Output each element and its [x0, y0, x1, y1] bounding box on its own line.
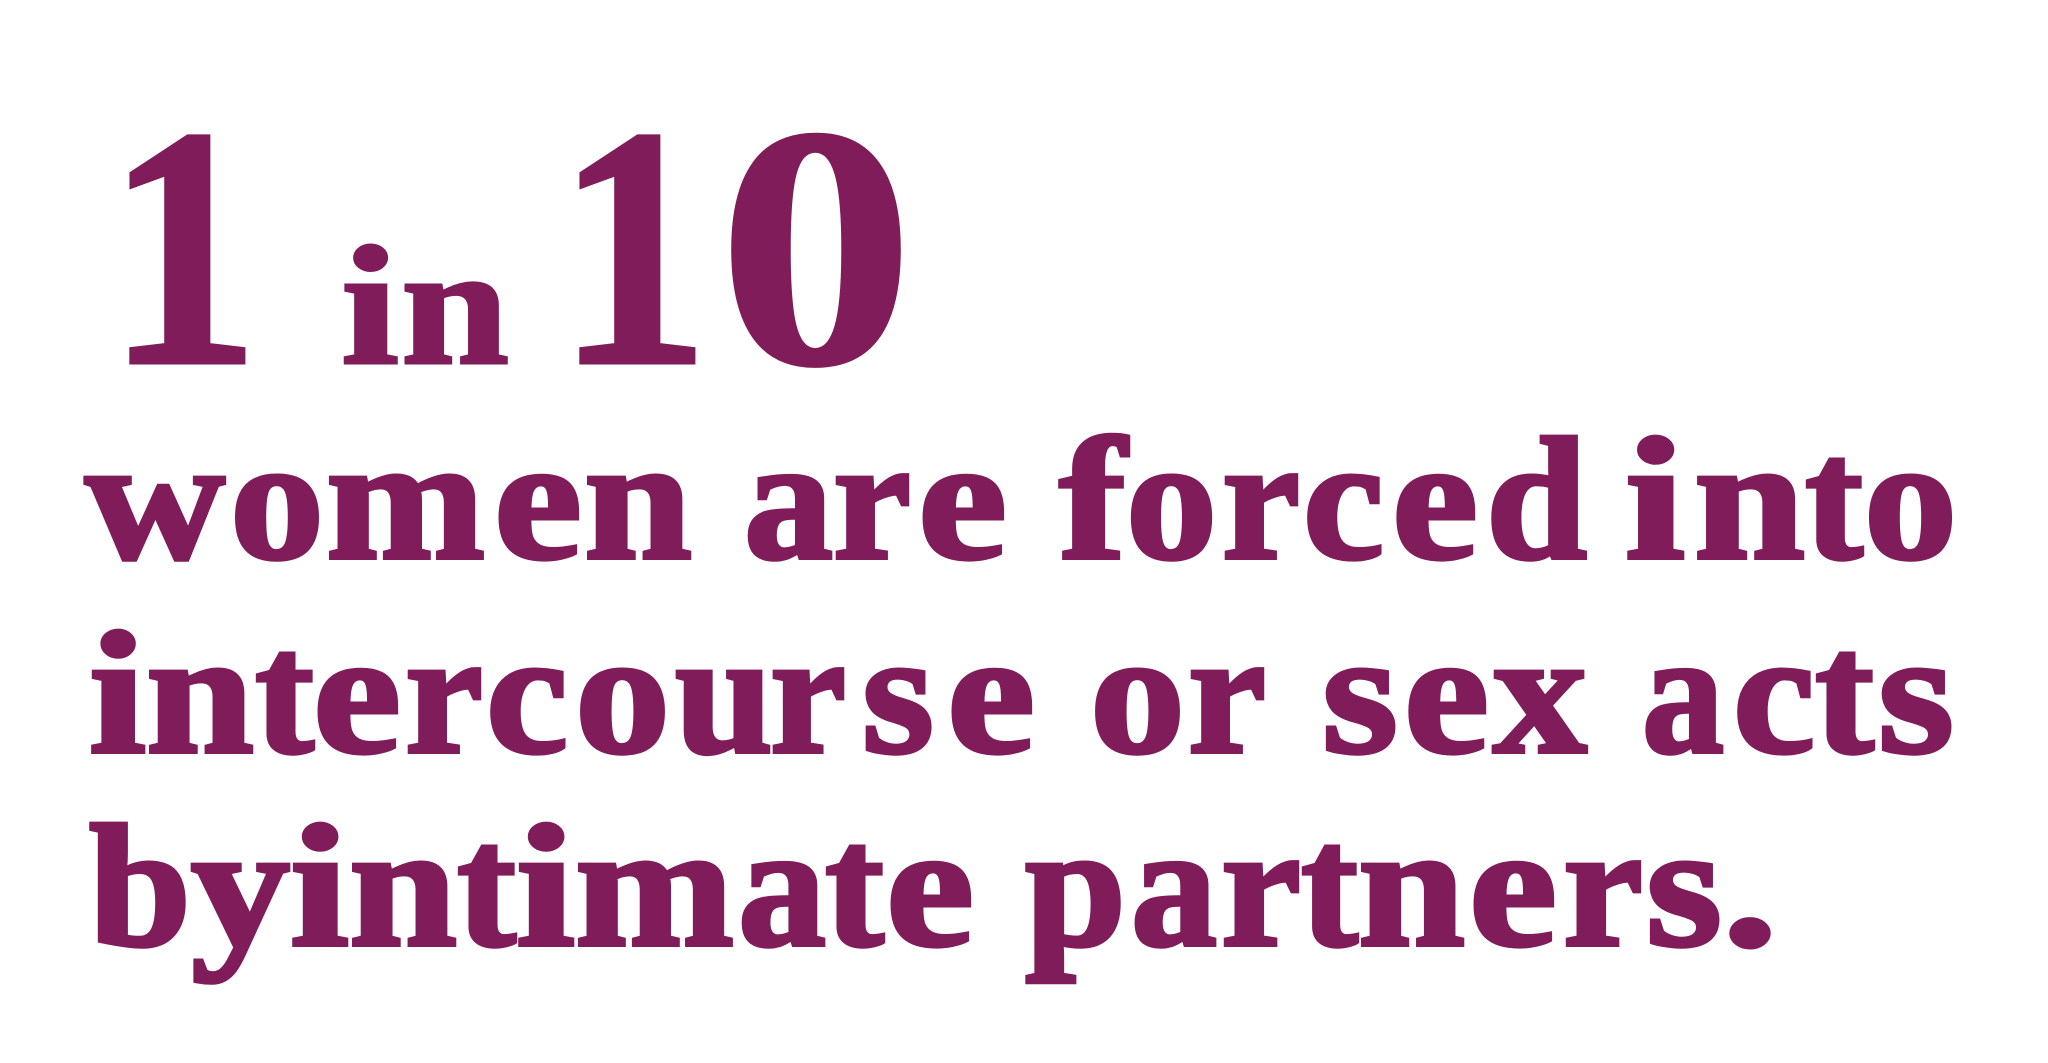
- statement line 3: by intimate partners.: r: [1221, 789, 1301, 983]
- statement line 1: women are forced into: o: [230, 402, 324, 596]
- statement line 2: intercourse or sex acts: x: [1493, 596, 1587, 790]
- statement line 2: intercourse or sex acts: e: [1404, 596, 1489, 790]
- statement line 2: intercourse or sex acts: e: [947, 596, 1035, 790]
- statement line 1: women are forced into: n: [1694, 402, 1805, 596]
- statement line 2: intercourse or sex acts: r: [770, 596, 846, 790]
- statement line 2: intercourse or sex acts: o: [575, 596, 670, 790]
- statement line 3: by intimate partners.: p: [1025, 789, 1126, 983]
- statement line 1: women are forced into: f: [1059, 402, 1128, 596]
- statement line 3: by intimate partners.: .: [1722, 789, 1778, 983]
- statement line 1: women are forced into: n: [584, 402, 692, 596]
- statement line 1: women are forced into: e: [494, 402, 582, 596]
- statement line 3: by intimate partners.: t: [457, 789, 516, 983]
- statement line 1: women are forced into: e: [1392, 402, 1478, 596]
- headline statistic: 1 in 10: 0: [718, 57, 914, 438]
- statement line 2: intercourse or sex acts: t: [1815, 596, 1874, 790]
- statement line 1: women are forced into: m: [326, 402, 485, 596]
- statement line 2: intercourse or sex acts: s: [1322, 596, 1398, 790]
- statement line 1: women are forced into: o: [1864, 402, 1957, 596]
- statement line 2: intercourse or sex acts: c: [486, 596, 568, 790]
- statement line 2: intercourse or sex acts: o: [1090, 596, 1185, 790]
- statement line 3: by intimate partners.: s: [1646, 789, 1722, 983]
- statement line 3: by intimate partners.: [89, 789, 1778, 983]
- statement line 1: women are forced into: d: [1486, 402, 1587, 596]
- statement line 2: intercourse or sex acts: a: [1642, 596, 1724, 790]
- statement line 1: women are forced into: o: [1126, 402, 1217, 596]
- statement line 2: intercourse or sex acts: r: [1188, 596, 1266, 790]
- statement line 2: intercourse or sex acts: s: [1878, 596, 1954, 790]
- statement line 1: women are forced into: r: [1222, 402, 1300, 596]
- statement line 3: by intimate partners.: e: [1469, 789, 1557, 983]
- headline statistic: 1 in 10: i: [341, 212, 399, 400]
- statement line 1: women are forced into: c: [1303, 402, 1384, 596]
- statement line 3: by intimate partners.: r: [1563, 789, 1643, 983]
- statement line 1: women are forced into: e: [918, 402, 1007, 596]
- statement line 3: by intimate partners.: y: [191, 789, 290, 983]
- statement line 3: by intimate partners.: n: [1358, 789, 1465, 983]
- statement line 3: by intimate partners.: t: [1301, 789, 1358, 983]
- statement line 2: intercourse or sex acts: c: [1733, 596, 1815, 790]
- statement line 2: intercourse or sex acts: s: [862, 596, 934, 790]
- statement line 2: intercourse or sex acts: n: [146, 596, 254, 790]
- statement line 3: by intimate partners.: e: [886, 789, 974, 983]
- headline statistic: 1 in 10: [106, 57, 914, 438]
- statement line 1: women are forced into: t: [1805, 402, 1863, 596]
- statement line 2: intercourse or sex acts: [89, 596, 1954, 790]
- statement line 3: by intimate partners.: i: [516, 789, 575, 983]
- statement line 3: by intimate partners.: n: [349, 789, 457, 983]
- statement line 1: women are forced into: i: [1625, 402, 1685, 596]
- headline statistic: 1 in 10: 1: [556, 57, 710, 438]
- statement line 1: women are forced into: a: [744, 402, 833, 596]
- headline statistic: 1 in 10: n: [401, 212, 509, 400]
- statement line 3: by intimate partners.: b: [89, 789, 191, 983]
- statement line 2: intercourse or sex acts: i: [89, 596, 146, 790]
- statement line 2: intercourse or sex acts: t: [255, 596, 314, 790]
- statement line 3: by intimate partners.: m: [575, 789, 734, 983]
- statement line 1: women are forced into: [85, 402, 1957, 596]
- statement line 3: by intimate partners.: t: [825, 789, 884, 983]
- statement line 2: intercourse or sex acts: u: [675, 596, 773, 790]
- statement line 1: women are forced into: r: [833, 402, 911, 596]
- statement line 3: by intimate partners.: a: [738, 789, 826, 983]
- statement line 3: by intimate partners.: a: [1131, 789, 1217, 983]
- statement line 1: women are forced into: w: [85, 402, 225, 596]
- statement line 2: intercourse or sex acts: e: [313, 596, 401, 790]
- statement line 3: by intimate partners.: i: [290, 789, 349, 983]
- statement line 2: intercourse or sex acts: r: [405, 596, 483, 790]
- headline statistic: 1 in 10: 1: [106, 57, 260, 438]
